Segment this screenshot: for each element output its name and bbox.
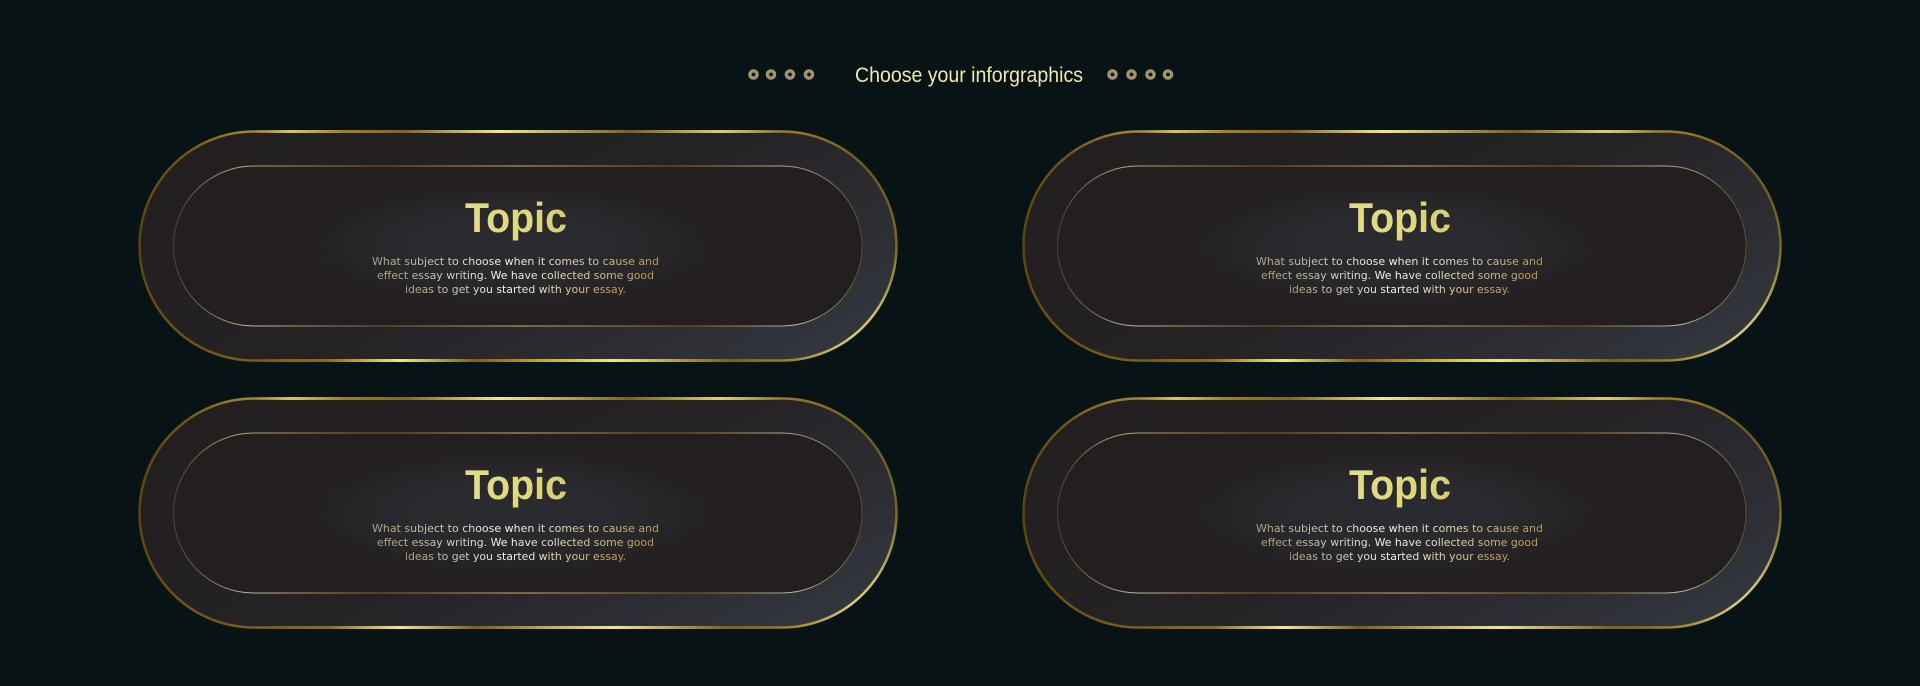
description: ideas to get you started with your essay.: [405, 551, 626, 563]
inner gold line: [1058, 166, 1746, 326]
panel: bottom right topic card: [1022, 397, 1782, 629]
heading: Topic: [465, 461, 567, 508]
card body: [138, 398, 898, 628]
inner gold line: [174, 166, 862, 326]
inner gold line: [1058, 433, 1746, 593]
description: effect essay writing. We have collected some good: [377, 537, 654, 549]
description: ideas to get you started with your essay.: [405, 284, 626, 296]
panel: top left topic card: [138, 130, 898, 362]
heading: Topic: [465, 194, 567, 241]
description: effect essay writing. We have collected some good: [377, 270, 654, 282]
description: What subject to choose when it comes to cause and: [372, 523, 659, 535]
outer gold border: [140, 130, 896, 362]
inner panel: [174, 166, 862, 326]
heading: Topic: [1349, 461, 1451, 508]
header: [750, 63, 1172, 87]
description: ideas to get you started with your essay.: [1289, 284, 1510, 296]
description: [372, 523, 659, 563]
description: [1256, 256, 1543, 296]
inner panel: [174, 433, 862, 593]
card body: [1022, 398, 1782, 628]
card body: [1022, 130, 1782, 362]
card body: [138, 130, 898, 362]
inner panel: [1058, 166, 1746, 326]
description: ideas to get you started with your essay.: [1289, 551, 1510, 563]
outer gold border: [140, 397, 896, 629]
description: What subject to choose when it comes to cause and: [1256, 256, 1543, 268]
description: [1256, 523, 1543, 563]
heading: Topic: [1349, 194, 1451, 241]
description: [372, 256, 659, 296]
outer gold border: [1024, 130, 1780, 362]
inner gold line: [174, 433, 862, 593]
icon: right decorative dots: [1109, 71, 1172, 78]
icon: left decorative dots: [750, 71, 813, 78]
title: Choose your inforgraphics: [855, 63, 1083, 87]
outer gold border: [1024, 397, 1780, 629]
panel: bottom left topic card: [138, 397, 898, 629]
description: effect essay writing. We have collected some good: [1261, 537, 1538, 549]
inner panel: [1058, 433, 1746, 593]
panel: top right topic card: [1022, 130, 1782, 362]
description: effect essay writing. We have collected some good: [1261, 270, 1538, 282]
description: What subject to choose when it comes to cause and: [1256, 523, 1543, 535]
description: What subject to choose when it comes to cause and: [372, 256, 659, 268]
